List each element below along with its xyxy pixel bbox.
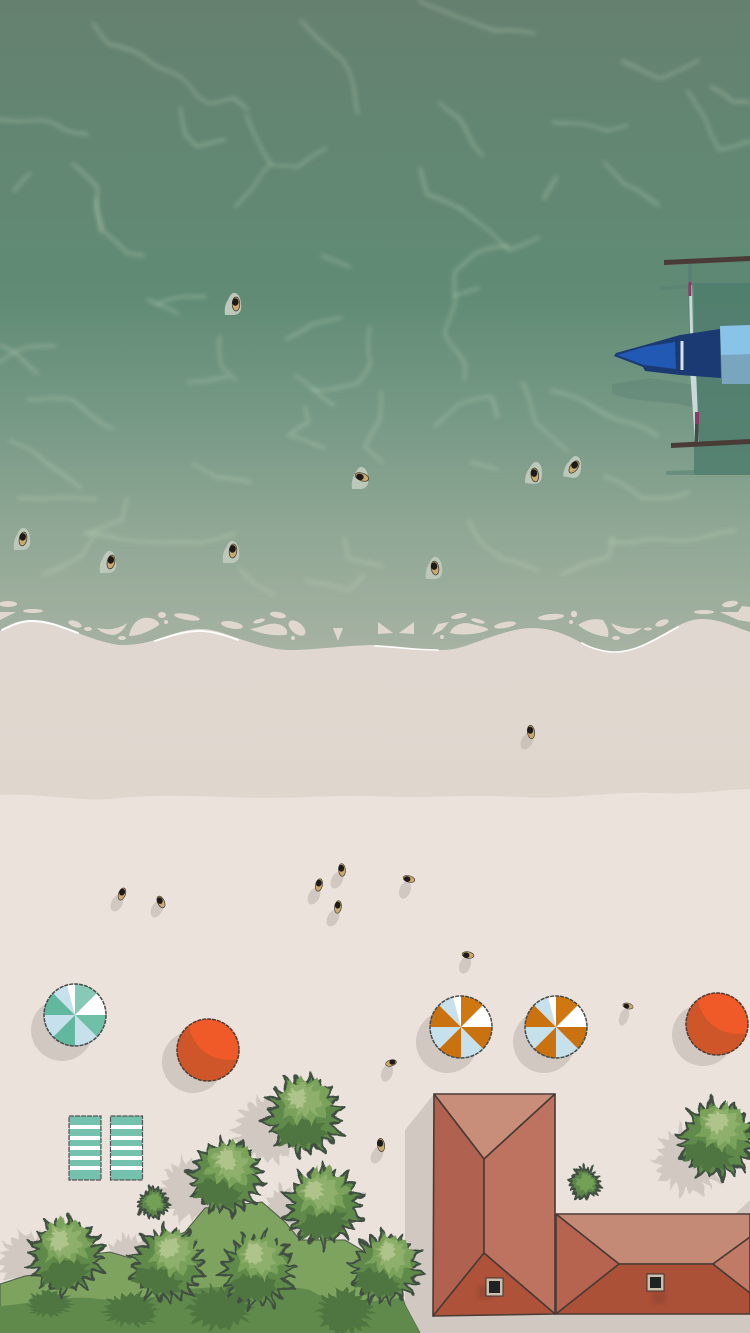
right wing roof xyxy=(556,1214,750,1314)
lounger right xyxy=(110,1116,142,1180)
tree 4 xyxy=(341,1224,430,1312)
shadows on grass xyxy=(24,1283,376,1333)
chimney left xyxy=(478,1278,503,1299)
umbrella: teal xyxy=(31,984,106,1061)
trees xyxy=(15,1067,750,1314)
tree 3 xyxy=(269,1153,376,1259)
tree 2 xyxy=(179,1132,271,1222)
water caustics xyxy=(0,0,750,598)
tree 6 xyxy=(117,1216,215,1313)
tree 1 xyxy=(254,1067,353,1164)
umbrella: red right xyxy=(672,992,749,1066)
bow deck xyxy=(617,342,676,369)
sun loungers xyxy=(69,1116,142,1180)
hull stripe xyxy=(680,341,684,370)
tree shadows on sand xyxy=(0,1093,729,1297)
small tree right xyxy=(564,1163,605,1203)
tree 5 xyxy=(212,1226,302,1314)
tree 7 xyxy=(15,1206,116,1306)
boat xyxy=(614,256,750,448)
lounger left xyxy=(69,1116,101,1180)
building xyxy=(433,1094,750,1316)
umbrella: orange 1 xyxy=(416,996,492,1073)
outrigger bars xyxy=(664,256,750,448)
person on wet sand xyxy=(518,725,536,752)
water xyxy=(0,0,750,660)
people on dry sand xyxy=(108,869,631,1166)
building shadow xyxy=(405,1094,750,1333)
dry sand xyxy=(0,789,750,1333)
outrigger poles xyxy=(688,264,699,442)
umbrella: orange 2 xyxy=(513,996,587,1073)
chimney right xyxy=(647,1274,666,1304)
hull xyxy=(614,329,721,378)
shoreline highlights xyxy=(2,621,678,652)
boat shadow on water xyxy=(612,261,750,475)
beach people xyxy=(108,725,634,1166)
small tree left xyxy=(136,1187,170,1219)
foam patches xyxy=(0,600,750,641)
wet sand xyxy=(0,619,750,810)
grass xyxy=(0,1202,420,1333)
swimmers xyxy=(14,293,583,579)
tree right xyxy=(667,1091,750,1188)
left wing roof xyxy=(433,1094,555,1316)
cabin roof xyxy=(720,325,750,355)
umbrella: red left xyxy=(162,1018,240,1093)
